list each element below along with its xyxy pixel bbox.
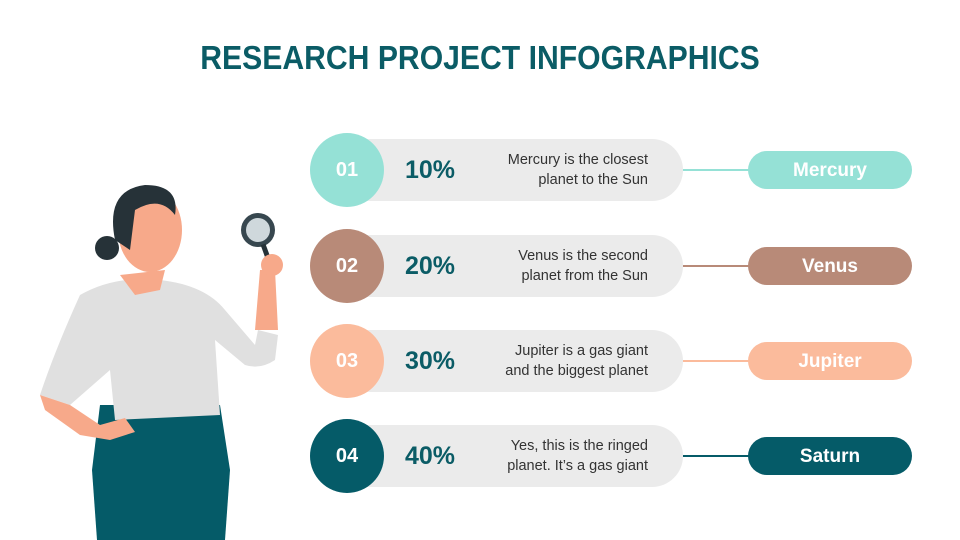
text 1 <box>508 152 648 188</box>
text 3: and the biggest planet <box>505 363 648 379</box>
label Venus <box>748 247 912 285</box>
bar 01 <box>340 139 683 201</box>
number 01 <box>310 133 384 207</box>
text 4 <box>507 438 648 474</box>
bar 03 <box>340 330 683 392</box>
percent 40: 40% <box>405 442 455 470</box>
text 3 <box>505 343 648 379</box>
row 2 <box>310 229 912 303</box>
illustration: woman with magnifier <box>40 185 283 540</box>
number 03 <box>310 324 384 398</box>
text 2: Venus is the second <box>518 248 648 264</box>
label Jupiter: Jupiter <box>798 351 862 372</box>
number 02: 02 <box>336 255 358 277</box>
row 4 <box>310 419 912 493</box>
bar 02 <box>340 235 683 297</box>
number 04 <box>310 419 384 493</box>
text 1: Mercury is the closest <box>508 152 648 168</box>
text 4: planet. It’s a gas giant <box>507 458 648 474</box>
percent 20: 20% <box>405 252 455 280</box>
number 02 <box>310 229 384 303</box>
number 01: 01 <box>336 159 358 181</box>
title: RESEARCH PROJECT INFOGRAPHICS <box>200 40 760 77</box>
text 4: Yes, this is the ringed <box>511 438 648 454</box>
label Saturn <box>748 437 912 475</box>
text 2: planet from the Sun <box>521 268 648 284</box>
number 04: 04 <box>336 445 358 467</box>
label Saturn: Saturn <box>800 446 860 467</box>
row 3 <box>310 324 912 398</box>
number 03: 03 <box>336 350 358 372</box>
percent 10: 10% <box>405 156 455 184</box>
text 1: planet to the Sun <box>538 172 648 188</box>
text 2 <box>518 248 648 284</box>
bar 04 <box>340 425 683 487</box>
label Mercury <box>748 151 912 189</box>
label Venus: Venus <box>802 256 858 277</box>
percent 30: 30% <box>405 347 455 375</box>
row 1 <box>310 133 912 207</box>
label Jupiter <box>748 342 912 380</box>
text 3: Jupiter is a gas giant <box>515 343 648 359</box>
label Mercury: Mercury <box>793 160 867 181</box>
